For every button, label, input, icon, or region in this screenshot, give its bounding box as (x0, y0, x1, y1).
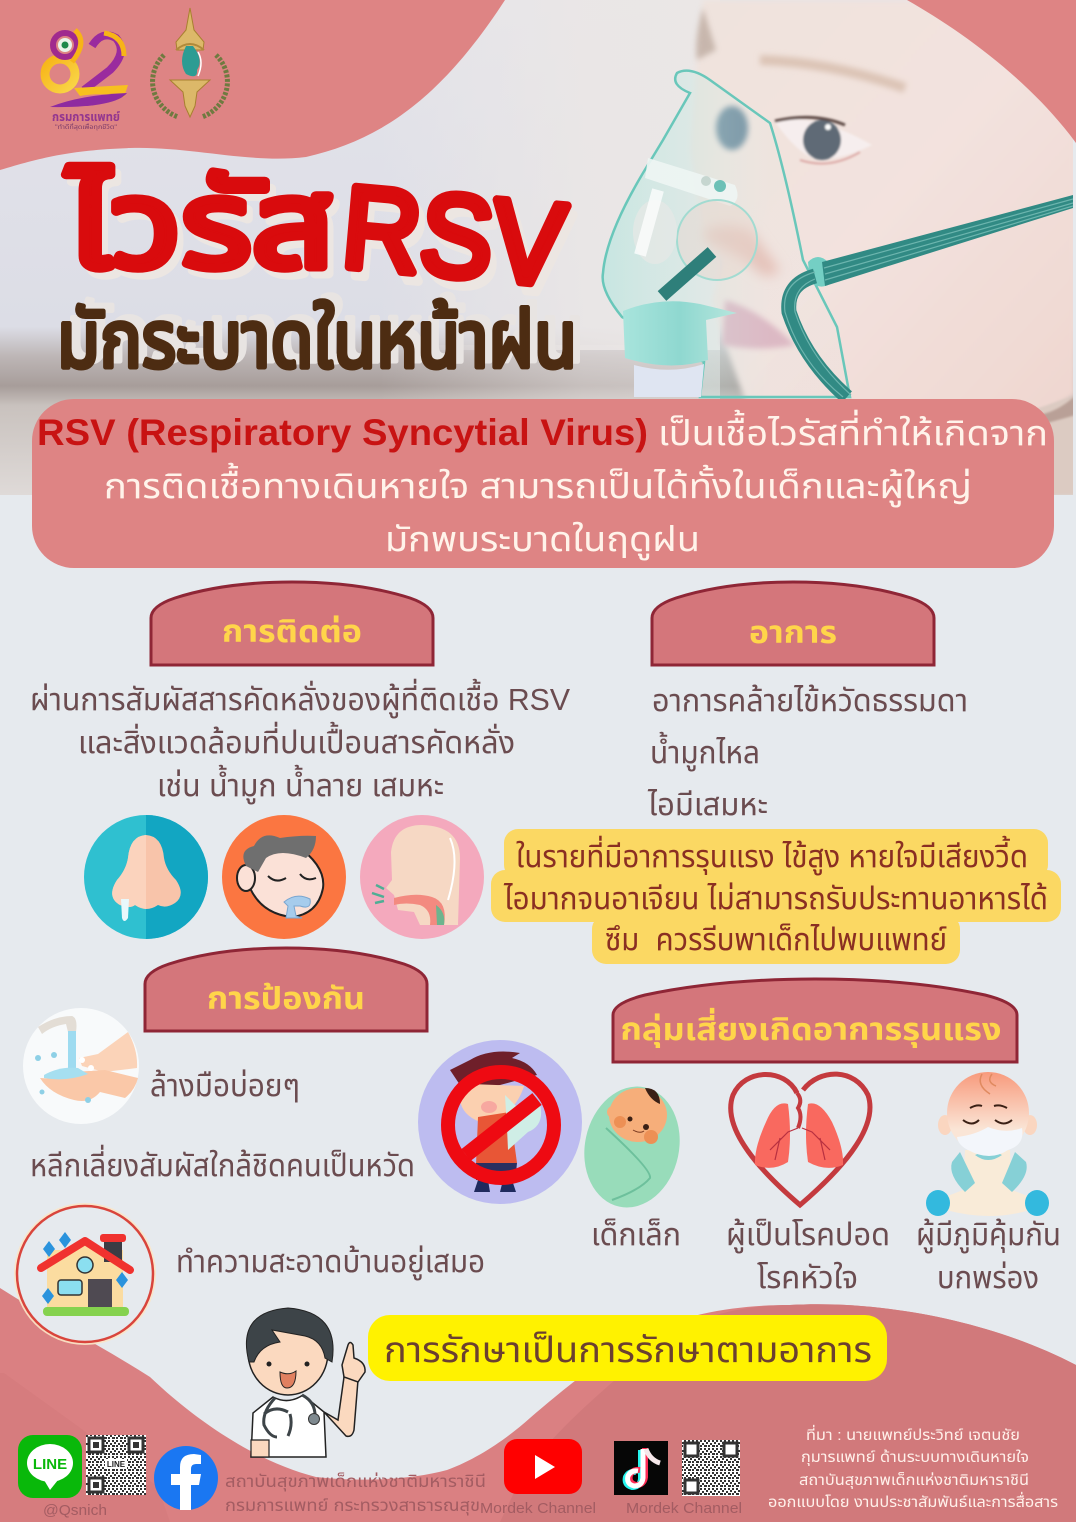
heading: high-risk groups: กลุ่มเสี่ยงเกิดอาการรุนแรง (620, 1007, 1002, 1048)
text: institute name (225, 1472, 486, 1516)
icon: TikTok (614, 1441, 668, 1495)
pink wave: bottom (0, 1288, 1076, 1522)
logo: 82 years Department of Medical Services (45, 30, 128, 131)
text: avoid contact: หลีกเลี่ยงสัมผัสใกล้ชิดคนเป็นหวัด (30, 1144, 415, 1183)
text: TikTok channel: Mordek Channel (626, 1500, 742, 1517)
icon: YouTube (504, 1439, 582, 1494)
callout: treatment: การรักษาเป็นการรักษาตามอาการ (384, 1329, 872, 1370)
child's eye (775, 117, 872, 164)
subtitle: epidemic in rainy season: มักระบาดในหน้าฝน (66, 289, 584, 378)
text: symptoms list: อาการคล้ายไข้หวัดธรรมดา (652, 683, 968, 718)
panel: RSV definition: มักพบระบาดในฤดูฝน (385, 520, 700, 560)
text: institute name: สถาบันสุขภาพเด็กแห่งชาติมหาราชินี (225, 1472, 486, 1492)
logo: 82 years Department of Medical Services: กรมการแพทย์ (52, 110, 120, 124)
elastic strap (785, 195, 1073, 397)
heading: symptoms: อาการ (749, 615, 837, 650)
QR code: LINE: LINE (107, 1460, 126, 1469)
icon: LINE: LINE (33, 1456, 67, 1473)
panel: RSV definition: เป็นเชื้อไวรัสที่ทำให้เกิดจาก (658, 409, 1048, 453)
icon: lungs in a heart (731, 1074, 870, 1205)
text: transmission description (30, 678, 570, 804)
title: RSV virus: ไวรัส (72, 164, 340, 300)
subtitle: epidemic in rainy season: มักระบาดในหน้าฝน (57, 295, 577, 384)
text: immunocompromised (916, 1217, 1061, 1295)
icon: swaddled baby (573, 1078, 691, 1216)
text: source credits: สถาบันสุขภาพเด็กแห่งชาติมหาราชินี (799, 1471, 1029, 1489)
text: LINE handle: @Qsnich (43, 1502, 107, 1519)
title: RSV virus: RSV (338, 161, 570, 310)
text: source credits: ออกแบบโดย งานประชาสัมพันธ์และการสื่อสาร (768, 1491, 1058, 1511)
callout: treatment (368, 1315, 887, 1381)
logo: 82 years Department of Medical Services: "ทำดีที่สุดเพื่อทุกชีวิต" (55, 122, 117, 131)
heading: prevention (145, 948, 427, 1031)
callout: severe symptoms warning (491, 829, 1061, 964)
text: institute name: กรมการแพทย์ กระทรวงสาธารณสุข (225, 1496, 480, 1516)
callout: severe symptoms warning: ไอมากจนอาเจียน ไม่สามารถรับประทานอาหารได้ (503, 881, 1048, 916)
icon: LINE (18, 1435, 82, 1498)
heading: transmission: การติดต่อ (222, 614, 362, 649)
icon: Facebook (154, 1446, 218, 1510)
icon: hand washing (23, 1008, 139, 1124)
panel: RSV definition (32, 399, 1054, 568)
illustration: doctor pointing up (246, 1308, 365, 1457)
icon: runny nose (84, 815, 208, 939)
text: symptoms list: น้ำมูกไหล (650, 731, 760, 771)
text: source credits: กุมารแพทย์ ด้านระบบทางเดินหายใจ (801, 1449, 1029, 1466)
header photo: child wearing an oxygen mask (0, 0, 1076, 495)
heading: high-risk groups (613, 979, 1017, 1062)
logo: royal medical emblem (153, 8, 227, 117)
heading: transmission (151, 582, 433, 665)
text: young children: เด็กเล็ก (591, 1217, 681, 1252)
title: RSV virus (66, 157, 576, 319)
text: YouTube channel: Mordek Channel (480, 1500, 596, 1517)
icon: throat cross section (360, 815, 484, 939)
heading: prevention: การป้องกัน (207, 981, 365, 1016)
text: lung and heart disease: โรคหัวใจ (757, 1260, 858, 1295)
text: source credits: ที่มา : นายแพทย์ประวิทย์ เจตนชัย (806, 1424, 1020, 1444)
text: transmission description: ผ่านการสัมผัสสารคัดหลั่งของผู้ที่ติดเชื้อ RSV (30, 678, 570, 718)
callout: severe symptoms warning: ในรายที่มีอาการรุนแรง ไข้สูง หายใจมีเสียงวี้ด (516, 835, 1028, 875)
panel: RSV definition: RSV (Respiratory Syncytial Virus) (37, 412, 648, 453)
text: transmission description: และสิ่งแวดล้อมที่ปนเปื้อนสารคัดหลั่ง (78, 721, 515, 760)
text: symptoms list: ไอมีเสมหะ (647, 787, 768, 822)
icon: no sneezing sign (418, 1040, 582, 1204)
heading: symptoms (652, 582, 934, 665)
icon: masked baby (926, 1072, 1049, 1216)
text: symptoms list (647, 683, 968, 822)
oxygen mask (603, 71, 850, 397)
pink wave: top left (0, 0, 505, 170)
icon: boy with phlegm (222, 815, 346, 939)
text: immunocompromised: บกพร่อง (937, 1260, 1039, 1295)
text: source credits (768, 1424, 1058, 1511)
text: immunocompromised: ผู้มีภูมิคุ้มกัน (916, 1217, 1061, 1253)
callout: severe symptoms warning: ซึม ควรรีบพาเด็กไปพบแพทย์ (605, 922, 947, 957)
icon: clean house (14, 1203, 156, 1345)
text: transmission description: เช่น น้ำมูก น้ำลาย เสมหะ (157, 764, 444, 804)
text: lung and heart disease (726, 1217, 890, 1295)
panel: RSV definition: การติดเชื้อทางเดินหายใจ สามารถเป็นได้ทั้งในเด็กและผู้ใหญ่ (104, 462, 972, 507)
title: RSV virus: ไวรัส (66, 157, 334, 293)
text: wash hands: ล้างมือบ่อยๆ (150, 1068, 300, 1103)
QR code: TikTok (682, 1440, 740, 1496)
pink wave: top right (907, 0, 1076, 143)
text: lung and heart disease: ผู้เป็นโรคปอด (726, 1217, 890, 1253)
text: clean the house: ทำความสะอาดบ้านอยู่เสมอ (176, 1244, 485, 1280)
title: RSV virus: RSV (344, 170, 576, 319)
QR code: LINE (86, 1435, 146, 1495)
